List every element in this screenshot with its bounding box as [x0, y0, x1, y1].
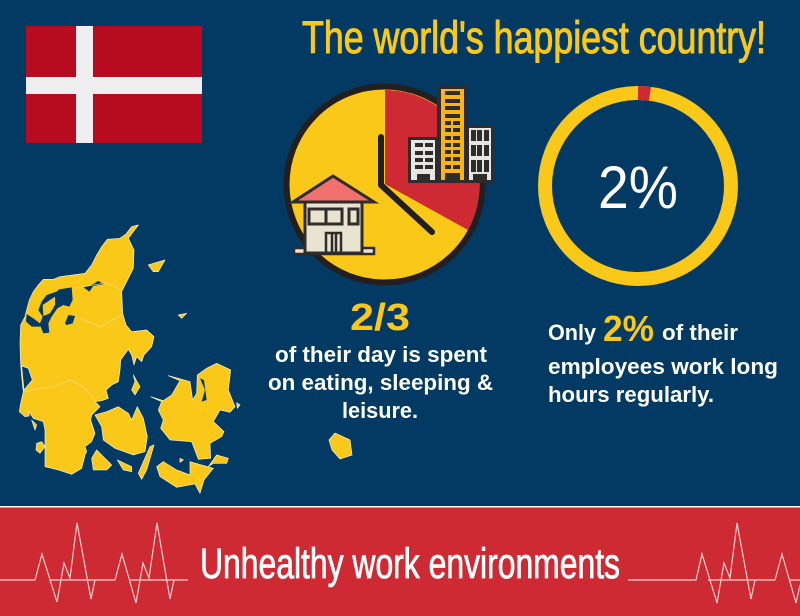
banner heading: Unhealthy work environments — [200, 540, 620, 588]
description: long hours: of their — [662, 320, 738, 345]
description: long hours — [548, 308, 778, 407]
description: long hours: Only — [548, 320, 597, 345]
donut value: 2% — [598, 154, 678, 221]
icon: Danish flag — [26, 26, 202, 143]
description: day spent: on eating, sleeping & — [268, 370, 493, 395]
icon: pie clock — [286, 86, 482, 282]
stat: two thirds — [268, 297, 499, 423]
description: long hours: employees work long — [548, 354, 778, 379]
icon: city buildings — [408, 85, 494, 183]
donut chart: 2 percent — [545, 93, 731, 279]
heartbeat line left — [0, 523, 188, 603]
description: day spent: leisure. — [342, 398, 418, 423]
donut red segment — [638, 93, 650, 94]
description: long hours: hours regularly. — [548, 382, 714, 407]
clock hands — [381, 137, 432, 232]
icon: house — [293, 176, 374, 254]
description: day spent: of their day is spent — [275, 342, 488, 367]
stat: two thirds: 2/3 — [350, 297, 410, 339]
description: long hours: 2% — [603, 308, 654, 349]
red slice of the clock — [385, 90, 479, 230]
map of Denmark — [19, 225, 240, 493]
heartbeat line right — [628, 523, 800, 603]
map: Bornholm island — [329, 433, 352, 459]
banner — [0, 506, 800, 616]
